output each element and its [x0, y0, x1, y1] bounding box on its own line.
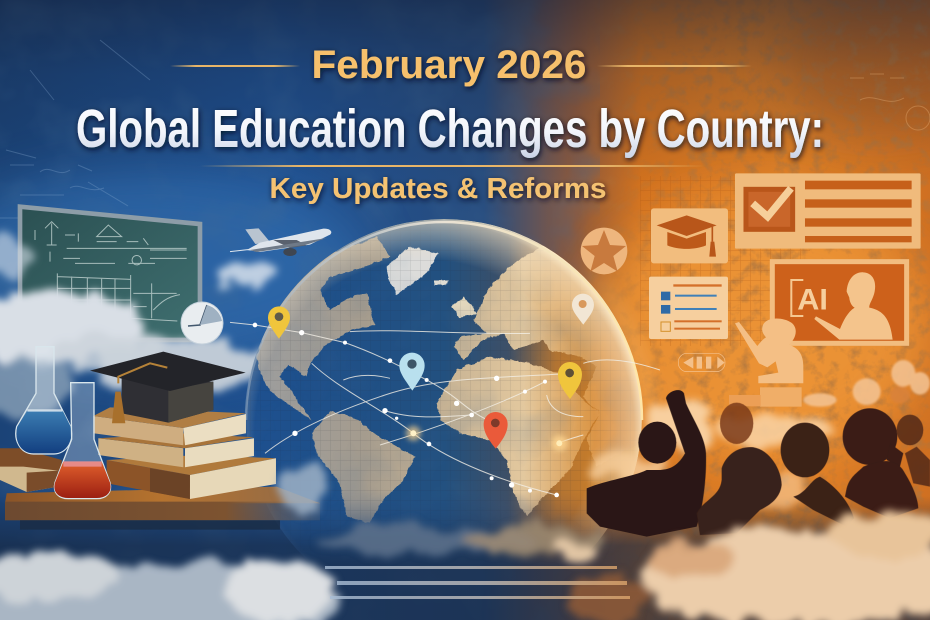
pin: yellow right: [558, 362, 582, 399]
panel: checkbox and bars: [735, 173, 921, 249]
stair lines: [325, 566, 630, 599]
bottom book: [107, 455, 276, 499]
left book stack: [0, 448, 62, 492]
top book: [93, 407, 246, 445]
faint chalk formulas: [0, 40, 930, 218]
panel: checklist: [649, 277, 728, 339]
panel: graduation cap: [651, 208, 728, 263]
panel: AI presentation screen: [772, 262, 907, 343]
shelf and books: [0, 347, 320, 530]
flask: red: [54, 383, 111, 499]
right-hand icons: [581, 173, 930, 407]
chalkboard: [20, 207, 200, 340]
student: fifth: [897, 415, 930, 487]
icon: star badge: [581, 228, 627, 274]
decorative props: [803, 360, 930, 407]
subheading: Key Updates & Reforms: [270, 173, 606, 205]
pin: blue: [399, 353, 425, 391]
globe: [246, 219, 656, 560]
small arrow badge: [678, 353, 725, 372]
panel: AI presentation screen: AI: [797, 283, 828, 316]
student: raised arm: [587, 390, 706, 537]
continents: [246, 230, 642, 530]
small sky clouds: [0, 231, 273, 288]
student: fourth: [843, 408, 918, 518]
globe rim: [246, 222, 642, 420]
student silhouettes: [587, 390, 930, 537]
pie chart orb: [181, 302, 223, 344]
middle book: [98, 433, 254, 467]
divider rule: [200, 165, 705, 167]
map pins: [268, 294, 594, 449]
shelf: [5, 487, 320, 530]
pin: yellow left: [268, 306, 290, 339]
presenter silhouette: [729, 318, 803, 407]
graduation cap: [90, 352, 246, 423]
airplane: [230, 228, 331, 256]
bottom clouds: [0, 466, 930, 620]
date heading: February 2026: [312, 43, 586, 87]
pin: white: [572, 294, 594, 325]
grid texture on orange background: [640, 176, 810, 346]
pin: red: [484, 412, 508, 449]
teacher silhouette: [814, 272, 893, 340]
left clouds: [0, 292, 270, 413]
network lines: [230, 322, 660, 497]
title block: [76, 43, 824, 205]
student: second: [697, 403, 782, 535]
student: third: [781, 423, 854, 527]
flask: blue: [16, 347, 72, 454]
orange clouds behind students: [587, 401, 835, 506]
